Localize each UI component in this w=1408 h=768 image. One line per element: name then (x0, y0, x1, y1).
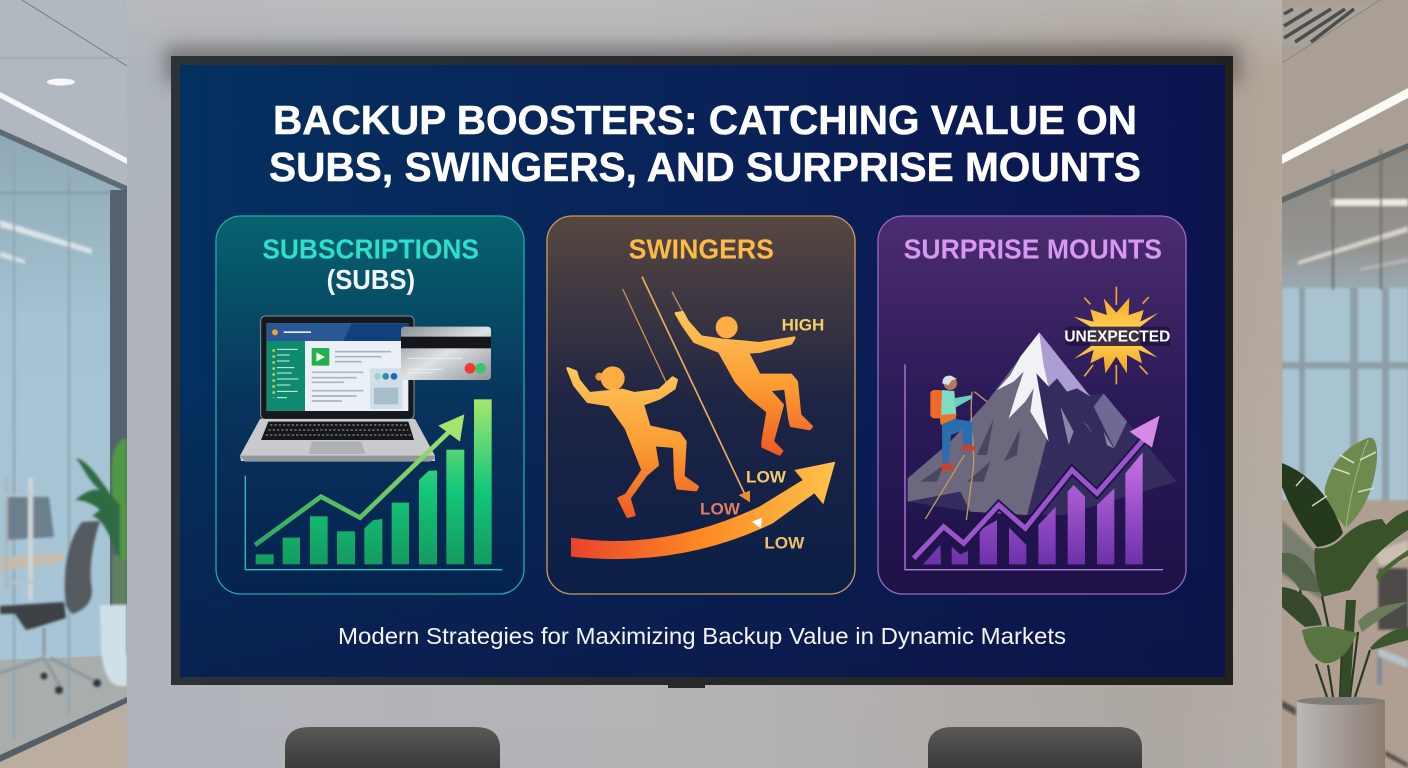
figure: swinger low (568, 366, 698, 517)
figure: swinger high (676, 312, 812, 454)
arrow: peaks trend (914, 416, 1160, 558)
label: low upper: LOW (746, 467, 786, 486)
arrow: swing curve (571, 462, 835, 559)
subtitle: Modern Strategies for Maximizing Backup Value in Dynamic Markets (338, 623, 1066, 649)
label: high: HIGH (782, 315, 824, 334)
meeting chairs (285, 727, 1142, 768)
heading: surprise mounts: SURPRISE MOUNTS (904, 233, 1162, 264)
panel: subscriptions (216, 216, 524, 594)
swing ropes (623, 277, 750, 502)
background: left office (0, 0, 128, 768)
icon: credit card (401, 327, 491, 380)
title (269, 97, 1141, 190)
title: BACKUP BOOSTERS: CATCHING VALUE ON (273, 97, 1137, 143)
icon: starburst (1065, 287, 1170, 384)
icon: mountain (908, 332, 1177, 515)
icon: climber (925, 376, 987, 520)
label: unexpected: UNEXPECTED (1064, 328, 1170, 345)
icon: laptop (240, 316, 435, 462)
icon: ceiling vent (1282, 5, 1372, 46)
bar chart: growth (245, 399, 502, 570)
icon: white marker (752, 518, 762, 528)
arrow: growth trend (255, 414, 464, 545)
background: right office (1282, 0, 1408, 768)
display frame (171, 56, 1233, 688)
icon: potted plant (1282, 438, 1408, 768)
label: low middle: LOW (700, 499, 740, 518)
heading: swingers: SWINGERS (629, 233, 774, 264)
heading: subscriptions: SUBSCRIPTIONS (262, 233, 479, 264)
heading: subs: (SUBS) (327, 264, 415, 295)
panel: surprise mounts (878, 216, 1186, 594)
bar chart: peaks (905, 364, 1163, 570)
label: low bottom: LOW (764, 533, 805, 552)
title: SUBS, SWINGERS, AND SURPRISE MOUNTS (269, 144, 1141, 190)
panel: swingers (547, 216, 855, 594)
display screen (180, 65, 1225, 677)
